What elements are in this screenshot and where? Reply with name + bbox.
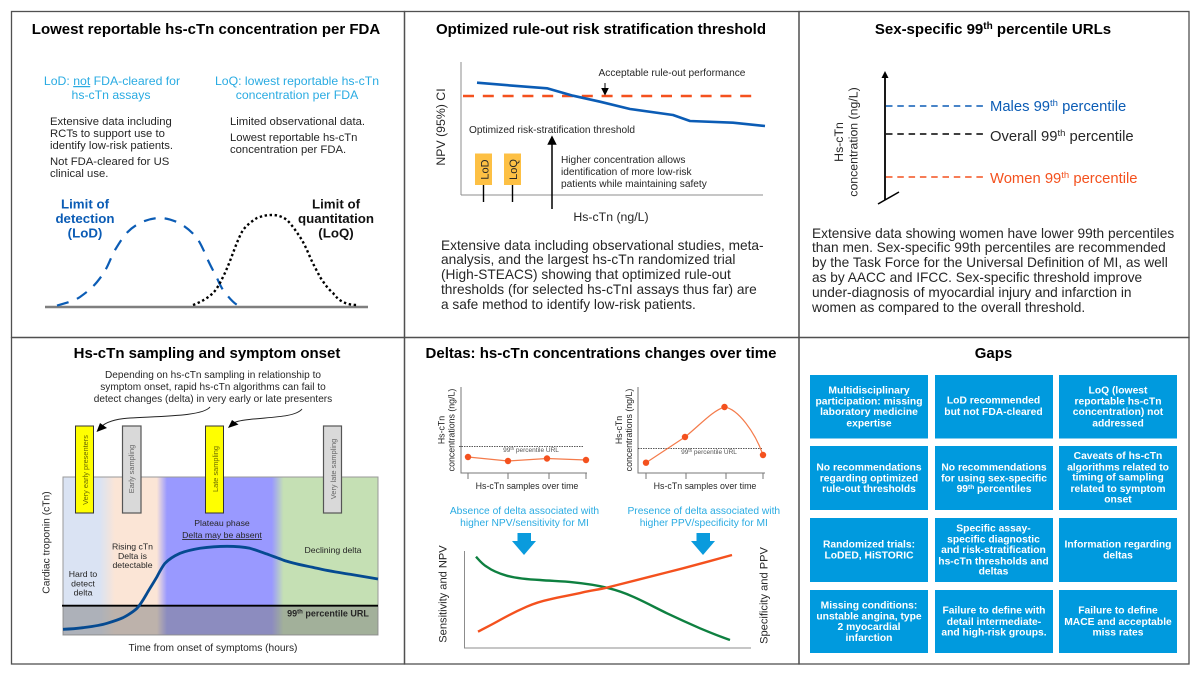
higher concentration note: Higher concentration allows (561, 155, 685, 166)
gap: assay-specific: Specific assay- (956, 523, 1031, 534)
chart: presence of delta: percentile URL (692, 449, 737, 456)
sex-specific paragraph: women as compared to the overall threshold. (811, 300, 1085, 315)
sampling explanation: Depending on hs-cTn sampling in relationship to (105, 370, 321, 381)
LoQ body text: Limited observational data. (230, 116, 365, 128)
label: limit of quantitation: quantitation (298, 211, 374, 226)
LoD body text: identify low-risk patients. (50, 140, 173, 152)
arrow: to late sampling (228, 409, 302, 428)
heading: lowest reportable: Lowest reportable hs-cTn concentration per FDA (32, 21, 380, 38)
left axis label: Sensitivity and NPV (438, 545, 450, 643)
threshold label: Optimized risk-stratification threshold (469, 125, 635, 136)
99th percentile URL label: 99 (287, 608, 297, 618)
women label: Women 99 (990, 171, 1061, 187)
heading: sex-specific: percentile URLs (993, 21, 1111, 38)
sex-specific paragraph: under-diagnosis of myocardial injury and infarction in (812, 285, 1132, 300)
overall label: percentile (1065, 129, 1134, 145)
percentile axis chart (832, 71, 1138, 204)
chart: presence of delta: Hs-cTn (614, 416, 624, 444)
chart: absence of delta: Hs-cTn samples over time (476, 481, 578, 491)
heading: gaps: Gaps (975, 345, 1012, 362)
chart: absence of delta: Hs-cTn (436, 416, 446, 444)
chart: presence of delta (614, 387, 766, 491)
heading: sex-specific: Sex-specific 99 (875, 21, 983, 38)
chart: absence of delta: 99 (503, 447, 510, 454)
gap: optimized thresholds: regarding optimized (820, 474, 918, 485)
marker: late sampling (206, 426, 224, 513)
gap: multidisciplinary (810, 375, 928, 438)
gap: missing conditions (810, 590, 928, 653)
phase: plateau: Delta may be absent (182, 530, 262, 540)
heading: sampling: Hs-cTn sampling and symptom onset (74, 345, 340, 362)
gap: multidisciplinary: laboratory medicine (820, 407, 918, 418)
caption: absence of delta: Absence of delta associated with (450, 506, 599, 517)
distribution curves (45, 215, 368, 307)
optimized threshold paragraph: analysis, and the largest hs-cTn randomized trial (441, 252, 735, 267)
99th percentile URL label: percentile URL (303, 608, 369, 618)
LoD marker: LoD (480, 159, 492, 180)
LoD body text: Extensive data including (50, 116, 172, 128)
gap: missing conditions: Missing conditions: (821, 600, 917, 611)
gap: LoD: LoD recommended (947, 396, 1040, 407)
gap: LoQ (1059, 375, 1177, 438)
LoD body text: Not FDA-cleared for US (50, 156, 170, 168)
x axis label: Time from onset of symptoms (hours) (129, 643, 297, 654)
label: limit of detection: Limit of (61, 196, 110, 212)
y axis label: NPV (95%) CI (434, 88, 448, 166)
chart: absence of delta (436, 387, 589, 491)
phase: hard to detect: Hard to (69, 569, 97, 579)
gap: LoD (935, 375, 1053, 438)
label: limit of detection: detection (55, 211, 115, 226)
sex-specific paragraph: Extensive data showing women have lower 99th percentiles (812, 226, 1174, 241)
gap: missing conditions: infarction (846, 633, 892, 644)
phase: plateau: Plateau phase (194, 518, 250, 528)
gap: sex-specific: th (968, 484, 974, 491)
LoQ marker: LoQ (508, 159, 520, 180)
gap: optimized thresholds (810, 446, 928, 510)
phase: declining: Declining delta (304, 545, 362, 555)
phase: hard to detect: delta (74, 588, 93, 598)
gap: optimized thresholds: No recommendations (816, 462, 922, 473)
gap: assay-specific: hs-cTn thresholds and (938, 556, 1049, 567)
phase: hard to detect: detect (71, 578, 95, 588)
marker: late sampling: Late sampling (211, 446, 220, 492)
males label: Males 99 (990, 99, 1050, 115)
right axis label: Specificity and PPV (758, 546, 770, 644)
panel: gaps (799, 338, 1189, 664)
sex-specific paragraph: than men. Sex-specific 99th percentiles are recommended (812, 240, 1166, 255)
LoD body text: RCTs to support use to (50, 128, 165, 140)
marker: very late sampling (324, 426, 342, 513)
label: limit of quantitation: (LoQ) (318, 226, 354, 240)
gap: caveats: onset (1104, 494, 1132, 505)
gap: assay-specific: deltas (979, 567, 1009, 578)
gap: sex-specific: No recommendations (941, 462, 1047, 473)
gap: multidisciplinary: Multidisciplinary (828, 385, 910, 396)
optimized threshold paragraph: Extensive data including observational studies, meta- (441, 238, 764, 253)
gap: sex-specific: 99 (957, 484, 1032, 495)
gap: risk groups (935, 590, 1053, 653)
axis label: concentration (ng/L) (846, 87, 860, 197)
gap: caveats: algorithms related to (1067, 462, 1169, 473)
axis label: Hs-cTn (832, 122, 846, 162)
heading: sex-specific: th (983, 21, 993, 32)
gap: missing conditions: unstable angina, type (816, 612, 922, 623)
gap: sex-specific: percentiles (974, 484, 1032, 495)
optimized threshold paragraph: a safe method to identify low-risk patients. (441, 297, 696, 312)
gap: missing conditions: 2 myocardial (838, 622, 901, 633)
chart: presence of delta: concentrations (ng/L) (624, 389, 634, 471)
gap: caveats: timing of sampling (1072, 473, 1164, 484)
chart: presence of delta: th (688, 448, 693, 453)
arrow: down left (512, 533, 536, 555)
label: limit of quantitation: Limit of (312, 196, 361, 212)
LoD body text: clinical use. (50, 168, 108, 180)
marker: very early presenters (76, 426, 94, 513)
panel: sex-specific URLs (799, 12, 1189, 338)
sex-specific paragraph: by the Task Force for the Universal Definition of MI, as well (812, 255, 1168, 270)
gap: optimized thresholds: rule-out thresholds (822, 484, 916, 495)
overall label: th (1057, 128, 1065, 139)
LoD marker (475, 154, 492, 202)
chart: absence of delta: th (510, 446, 515, 451)
gap: deltas: Information regarding (1065, 539, 1171, 550)
gap: caveats: related to symptom (1071, 484, 1165, 495)
NPV line chart (434, 62, 765, 224)
marker: early sampling (122, 426, 141, 513)
chart: performance curves (438, 545, 770, 648)
gap: assay-specific (935, 518, 1053, 582)
x axis label: Hs-cTn (ng/L) (573, 210, 649, 224)
gap: MACE: Failure to define (1078, 606, 1158, 617)
gap: LoQ: addressed (1092, 418, 1144, 429)
LoQ marker (504, 154, 521, 202)
label: limit of detection: (LoD) (68, 226, 102, 240)
LoQ body text: concentration per FDA. (230, 144, 346, 156)
panel: deltas (404, 338, 799, 664)
gap: risk groups: detail intermediate- (947, 617, 1042, 628)
LoQ body text: Lowest reportable hs-cTn (230, 132, 357, 144)
chart: absence of delta: concentrations (ng/L) (446, 389, 456, 471)
heading: optimized threshold: Optimized rule-out risk stratification threshold (436, 21, 766, 38)
arrow: down right (691, 533, 715, 555)
panel: optimized rule-out threshold (404, 12, 799, 338)
heading: deltas: Deltas: hs-cTn concentrations changes over time (426, 345, 776, 362)
chart: presence of delta: 99 (681, 449, 688, 456)
gap: caveats: Caveats of hs-cTn (1074, 451, 1162, 462)
males label: th (1050, 98, 1058, 109)
overall label: Overall 99 (990, 129, 1057, 145)
gap: multidisciplinary: expertise (846, 418, 892, 429)
LoQ subheading: LoQ: lowest reportable hs-cTn (215, 74, 379, 88)
caption: presence of delta: Presence of delta associated with (627, 506, 780, 517)
chart: absence of delta: percentile URL (514, 447, 559, 454)
gap: LoD: but not FDA-cleared (944, 407, 1043, 418)
phase: rising: detectable (112, 560, 153, 570)
gap: risk groups: Failure to define with (943, 606, 1045, 617)
gap: risk groups: and high-risk groups. (941, 628, 1047, 639)
caption: presence of delta: higher PPV/specificity for MI (640, 518, 768, 529)
gap: randomized trials: Randomized trials: (823, 539, 915, 550)
marker: early sampling: Early sampling (127, 445, 136, 493)
sampling explanation: symptom onset, rapid hs-cTn algorithms can fail to (100, 382, 326, 393)
99th percentile URL label: th (297, 610, 303, 616)
phase: rising: Delta is (118, 551, 148, 561)
gap: assay-specific: specific diagnostic (947, 535, 1040, 546)
y axis label: Cardiac troponin (cTn) (42, 491, 52, 594)
gap: sex-specific: for using sex-specific (941, 474, 1047, 485)
troponin time-course chart (42, 477, 378, 654)
marker: very early presenters: Very early presenters (81, 435, 90, 505)
higher concentration note: patients while maintaining safety (561, 179, 708, 190)
optimized threshold paragraph: thresholds (for selected hs-cTnI assays thus far) are (441, 282, 757, 297)
marker: very late sampling: Very late sampling (329, 439, 338, 499)
gap: randomized trials (810, 518, 928, 582)
LoD subheading: hs-cTn assays (72, 88, 150, 102)
women label: th (1061, 170, 1069, 181)
arrow: to very early presenters (96, 407, 210, 432)
panel: sampling and symptom onset (12, 338, 404, 664)
gap: MACE: miss rates (1093, 628, 1144, 639)
males label: percentile (1058, 99, 1126, 115)
optimized threshold paragraph: (High-STEACS) showing that optimized rule-out (441, 267, 731, 282)
LoQ subheading: concentration per FDA (236, 88, 359, 102)
gap: deltas: deltas (1103, 551, 1133, 562)
gap: LoQ: LoQ (lowest (1089, 385, 1148, 396)
gap: assay-specific: and risk-stratification (941, 545, 1046, 556)
acceptable performance label: Acceptable rule-out performance (598, 68, 746, 79)
gap: MACE: MACE and acceptable (1064, 617, 1172, 628)
gap: randomized trials: LoDED, HiSTORIC (824, 551, 914, 562)
higher concentration note: identification of more low-risk (561, 167, 692, 178)
phase: rising: Rising cTn (112, 542, 153, 552)
sampling explanation: detect changes (delta) in very early or late presenters (94, 394, 332, 405)
gap: sex-specific (935, 446, 1053, 510)
panel: lowest reportable hs-cTn concentration (12, 12, 404, 338)
caption: absence of delta: higher NPV/sensitivity for MI (460, 518, 589, 529)
arrow: threshold (548, 137, 556, 209)
gap: LoQ: reportable hs-cTn (1075, 397, 1161, 408)
gap: deltas (1059, 518, 1177, 582)
chart: presence of delta: Hs-cTn samples over time (654, 481, 756, 491)
gap: MACE (1059, 590, 1177, 653)
gap: LoQ: concentration) not (1073, 407, 1164, 418)
gap: caveats (1059, 446, 1177, 510)
women label: percentile (1069, 171, 1138, 187)
arrow: acceptable performance (602, 83, 608, 94)
gap: multidisciplinary: participation: missing (816, 397, 922, 408)
LoD subheading: LoD: not FDA-cleared for (44, 74, 180, 88)
sex-specific paragraph: as by AACC and IFCC. Sex-specific threshold improve (812, 270, 1142, 285)
